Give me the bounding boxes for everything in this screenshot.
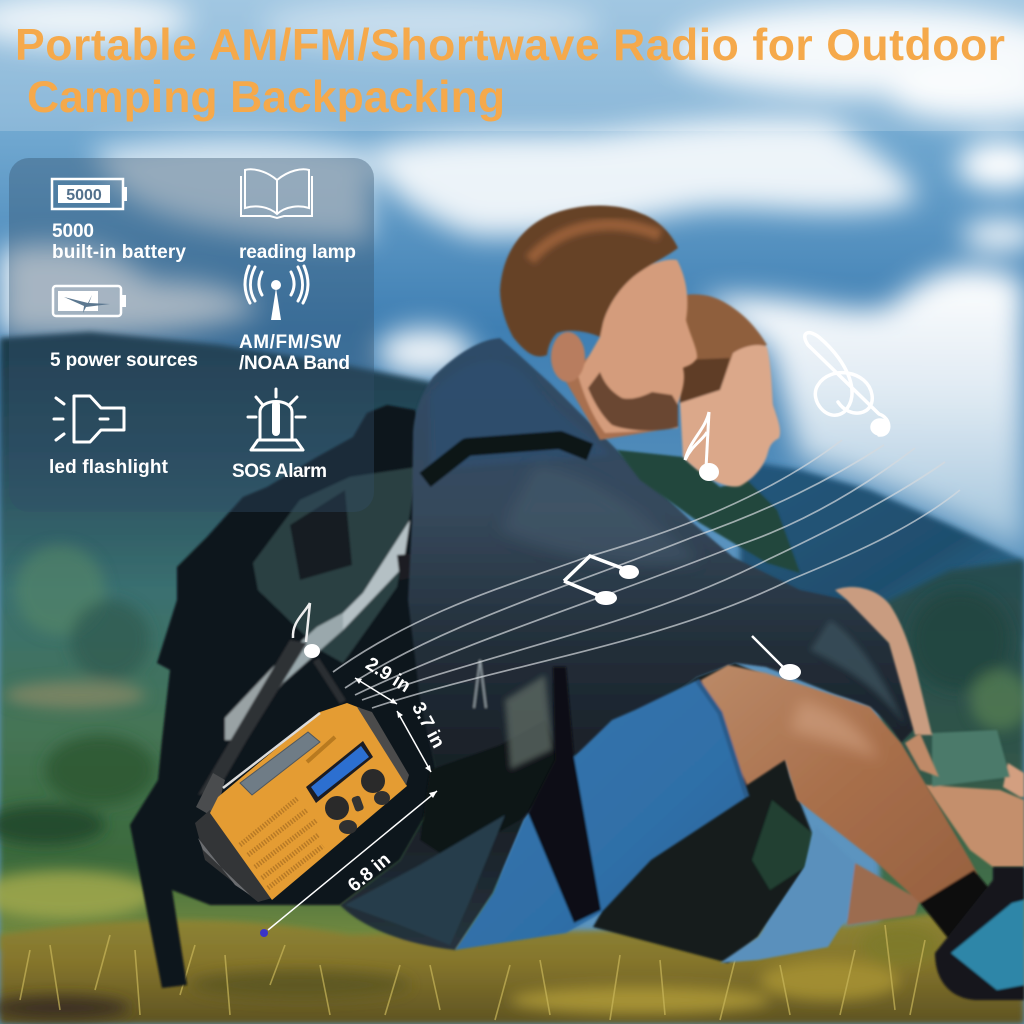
hoodie waist section [420,720,565,860]
far blue mountain [740,460,1024,640]
beamed note [564,556,639,605]
battery label [52,221,186,263]
hood highlight [430,360,610,470]
sky clouds [0,0,1024,550]
man's beard [588,372,678,431]
woman's lower leg [925,785,1024,867]
icon: alarm [248,389,305,450]
radio speaker grille [240,798,323,888]
flashlight label: led flashlight [49,457,169,478]
backpack teal panel [253,467,417,663]
music notes [293,333,889,680]
woman's sweater upper [617,450,800,573]
man's sock [920,870,993,937]
radio [195,703,409,902]
dimension: 3.7 in: 3.7 in [407,699,449,752]
backpack grey strap [198,640,307,795]
treble clef [805,333,889,435]
knee highlight [790,700,880,760]
radio strap bracket [196,773,225,818]
hoodie lower patch [345,815,505,945]
grass blades [20,925,925,1020]
woman's cuff [932,730,1010,787]
solar panel [240,732,320,795]
shoulder highlight [500,465,700,564]
dimension: 6.8 in [260,791,437,937]
hillside tree patches [0,545,1024,919]
icon: 5000 battery: 5000 [66,187,102,204]
radio display [306,741,373,803]
icon: antenna [245,266,308,320]
backpack buckle [397,553,424,580]
backpack dark pocket [290,490,352,580]
backpack pale strip [343,520,410,630]
icon: book [241,169,312,218]
reading lamp label: reading lamp [239,242,356,263]
dimension arrows [260,654,449,937]
icon: flashlight [54,396,124,442]
jeans hem [697,680,747,797]
power sources label: 5 power sources [50,350,198,371]
man's hoodie and torso [340,338,920,950]
sweater green tint [752,800,812,890]
man's ear [551,332,585,382]
sound wave lines [333,440,960,708]
man's face [578,260,697,433]
dimension: 6.8 in: 6.8 in [344,849,395,896]
radio knobs [325,769,390,834]
backpack [130,405,440,988]
icon: 5000 battery [52,179,127,209]
jeans lower [720,827,855,963]
battery label: 5000 [52,221,94,242]
radio right dark strip [357,707,409,785]
dimension: 3.7 in [397,699,449,772]
man's legs [455,665,1024,1000]
radio dark end cap [195,810,272,902]
sleeve highlight [810,620,905,725]
backpack black waist strap [528,667,601,923]
man's hair [500,206,678,356]
alarm label: SOS Alarm [232,461,327,482]
battery label: built-in battery [52,242,186,263]
title: Camping Backpacking [27,73,505,122]
man's lower thigh [847,863,920,925]
meadow [0,900,1024,1024]
woman's face [680,345,780,487]
man's boot [935,867,1024,1000]
eighth note on woman [685,412,719,481]
title band [0,0,1024,131]
note on arm [752,636,801,680]
woman's legs and sweater [574,450,1024,963]
shoulder strap [425,440,590,480]
band label: AM/FM/SW [239,332,341,353]
note on carabiner [293,603,320,658]
woman's head [676,294,780,487]
left hillside [0,332,500,950]
right green hill [880,560,1024,940]
panel: features [9,158,374,512]
radio body [210,703,407,900]
title: Portable AM/FM/Shortwave Radio for Outdoor [15,21,1005,70]
man's bare leg [701,665,978,903]
icon: charging battery [53,286,126,316]
dimension: 2.9 in: 2.9 in [362,654,414,697]
sweater under arm [574,663,812,963]
jeans upper [455,680,747,950]
backpack lower mesh [273,613,343,683]
man's hand [905,733,939,777]
drawcord [474,660,486,708]
radio top handle rod [223,713,320,788]
woman's knee [835,587,932,735]
woman's hair [676,294,767,405]
radio slot [307,737,335,762]
man's head [500,206,697,440]
woman's hand [1003,763,1024,797]
dark grass shadows [0,925,940,1020]
band label: /NOAA Band [239,353,350,374]
man's neck [565,345,660,440]
title [15,21,1005,122]
band label [239,332,350,374]
